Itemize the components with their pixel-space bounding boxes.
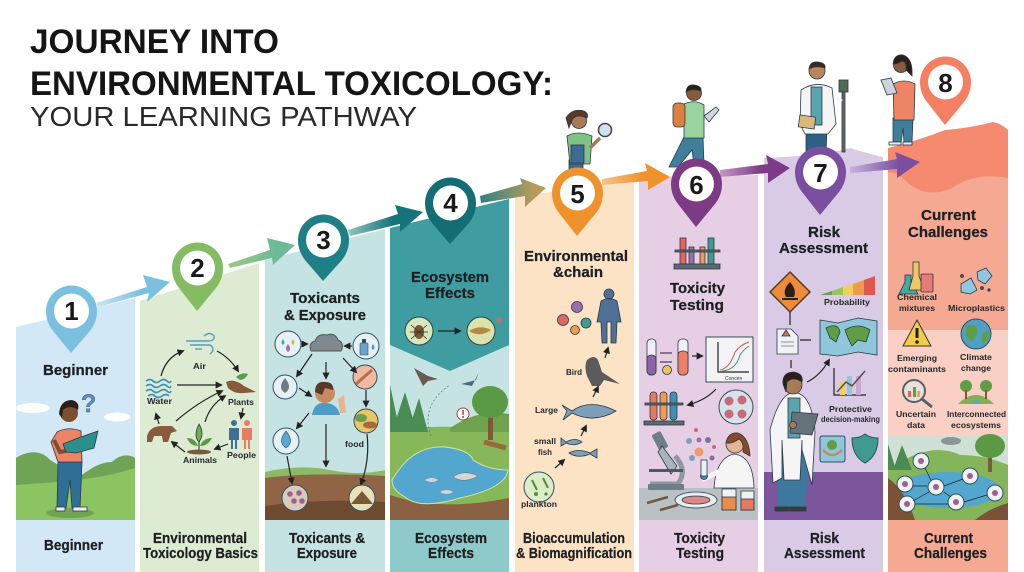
label: ecosystem: Effects — [428, 545, 474, 562]
icon: document — [777, 329, 798, 354]
arrow: 7 to 8 — [850, 152, 920, 178]
pin 7 — [795, 146, 846, 215]
panel: current challenges: Uncertain — [896, 409, 936, 419]
label: toxicity testing — [674, 530, 726, 562]
character: lab scientist — [700, 433, 754, 488]
heading: toxicants — [284, 290, 366, 324]
chart: probability bars — [820, 276, 875, 295]
pin 7: 7 — [813, 158, 828, 188]
icon: food — [354, 409, 378, 433]
panel: current challenges: mixtures — [899, 303, 935, 313]
heading: current challenges — [908, 207, 988, 241]
icon: microplastics — [960, 268, 992, 294]
diagram: environment cycle: Plants — [228, 397, 254, 407]
icon: large fish — [562, 404, 616, 420]
panel: risk assessment: Probability — [824, 297, 870, 307]
heading: environmental chain: Environmental — [524, 248, 628, 265]
landscape: interconnected ecosystem — [888, 434, 1008, 520]
icon: microscope — [648, 431, 684, 490]
panel: current challenges: contaminants — [888, 364, 946, 374]
pin 2 — [172, 243, 223, 311]
tube: salmon — [678, 339, 688, 375]
heading: toxicants: Toxicants — [290, 290, 360, 307]
label: toxicity testing: Testing — [676, 545, 724, 562]
heading: toxicity testing: Toxicity — [670, 280, 726, 297]
diagram: food chain: fish — [538, 447, 552, 457]
pin 5 — [552, 168, 603, 236]
diagram: exposure routes: food — [345, 439, 364, 449]
heading: ecosystem: Effects — [425, 285, 475, 302]
label: current challenges — [914, 530, 987, 562]
character: reading student: ? — [81, 390, 96, 418]
heading: toxicants: & Exposure — [284, 307, 366, 324]
chevron header — [390, 199, 509, 371]
pin 5: 5 — [570, 179, 585, 209]
soil layer — [265, 467, 385, 520]
landscape: hills — [16, 403, 135, 572]
icon: petri dish — [719, 390, 753, 424]
label: risk assessment: Assessment — [784, 545, 865, 562]
chart: trend — [834, 368, 866, 395]
icon: human — [597, 289, 621, 343]
label: toxicants: Exposure — [297, 545, 357, 562]
pin 2: 2 — [190, 253, 205, 283]
icon: soil contaminants — [282, 485, 308, 511]
arrows: cycle — [156, 351, 243, 452]
banner: wavy peak — [888, 122, 1008, 192]
icon: otter — [226, 373, 256, 393]
title: ENVIRONMENTAL TOXICOLOGY: — [30, 65, 553, 103]
chart: dose response: Concen — [725, 376, 742, 382]
icon: water drop — [273, 428, 299, 454]
icon: magnifier — [903, 380, 932, 407]
tube: purple — [647, 339, 656, 375]
heading: environmental chain: &chain — [553, 264, 603, 281]
label: bioaccumulation — [516, 530, 632, 562]
label: bioaccumulation: Bioaccumulation — [523, 530, 625, 547]
diagram: environment cycle — [146, 334, 256, 465]
heading: current challenges: Current — [921, 207, 976, 224]
heading: risk assessment — [779, 224, 868, 257]
icon: breathing person — [312, 382, 346, 415]
diagram: environment cycle: Water — [147, 396, 173, 406]
dots: particles — [686, 428, 716, 461]
label: toxicity testing: Toxicity — [674, 530, 726, 547]
diagram: environment cycle: Animals — [183, 455, 217, 465]
panel: current challenges: Climate — [960, 352, 992, 362]
label: beginner: Beginner — [44, 537, 103, 554]
title — [30, 23, 553, 132]
pin 8: 8 — [938, 68, 953, 98]
character: student with magnifier — [566, 110, 612, 172]
character: woman with tablet — [881, 55, 915, 145]
arrows: food chain — [555, 348, 608, 468]
pin 6 — [671, 158, 722, 227]
icon: sediment — [349, 485, 375, 511]
icon: test tube rack — [674, 238, 720, 269]
landscape: forest and pond — [390, 368, 509, 520]
icon: bottle — [353, 333, 379, 359]
diagram: food chain: Bird — [566, 367, 582, 377]
arrow: 5 to 6 — [602, 163, 670, 190]
icon: warning triangle — [903, 320, 931, 346]
icon: shield — [852, 434, 878, 463]
label: ecosystem: Ecosystem — [415, 530, 487, 547]
panel: ecosystem — [390, 199, 509, 572]
pin 1: 1 — [64, 296, 79, 326]
pin 4: 4 — [443, 188, 458, 218]
icon: droplets — [275, 331, 301, 357]
arrow: 3 to 4 — [348, 205, 423, 236]
arrow: 6 to 7 — [720, 155, 790, 183]
icon: connected trees — [958, 380, 994, 404]
icon: people — [229, 420, 252, 449]
icon: glassware — [647, 489, 754, 510]
label: basics: Environmental — [153, 530, 247, 547]
diagram: testing workflow — [644, 337, 754, 510]
icon: flasks — [899, 262, 933, 294]
label: risk assessment: Risk — [810, 530, 840, 547]
character: reading student — [46, 390, 98, 518]
pin 3 — [298, 215, 349, 281]
character: hiker with tablet — [669, 85, 719, 167]
icon: globe — [961, 319, 991, 349]
heading: ecosystem: Ecosystem — [411, 269, 489, 286]
panel: current challenges: change — [961, 363, 991, 373]
panel: current challenges — [888, 122, 1008, 572]
panel: current challenges: data — [907, 420, 925, 430]
pin 6: 6 — [689, 170, 704, 200]
icon: water — [146, 380, 171, 398]
icon: bird — [586, 357, 620, 386]
arrow: 2 to 3 — [228, 238, 295, 268]
label: current challenges: Current — [924, 530, 973, 547]
icon: hazard diamond — [770, 272, 810, 312]
label: toxicants: Toxicants & — [289, 530, 365, 547]
diagram: food chain: Large — [535, 405, 558, 415]
icon: protective hands — [820, 436, 845, 462]
icon: sprout — [187, 424, 212, 454]
icon: rack of tubes — [644, 392, 684, 425]
heading: toxicity testing: Testing — [670, 297, 724, 314]
arrow: 4 to 5 — [480, 178, 546, 207]
label: toxicants — [289, 530, 365, 562]
label: risk assessment — [784, 530, 865, 562]
label: basics: Toxicology Basics — [143, 545, 258, 562]
panel: current challenges: Chemical — [897, 292, 937, 302]
panel: toxicants — [265, 229, 385, 572]
diagram: food chain — [521, 289, 621, 509]
heading: environmental chain — [524, 248, 628, 281]
icon: insect to fish — [405, 317, 502, 345]
label: ecosystem — [415, 530, 487, 562]
character: field scientist — [798, 62, 848, 152]
title: JOURNEY INTO — [30, 23, 279, 61]
chart: dose response — [706, 337, 753, 382]
heading: beginner: Beginner — [43, 362, 108, 379]
icon: contaminant dots — [558, 302, 591, 334]
panel: bioaccumulation — [515, 180, 634, 572]
panel: risk assessment: decision-making — [821, 414, 880, 424]
diagram: food chain: plankton — [521, 499, 557, 509]
icon: bear — [147, 426, 177, 442]
arrow: 1 to 2 — [96, 275, 170, 307]
label: basics — [143, 530, 258, 562]
diagram: environment cycle: Air — [193, 361, 207, 371]
panel: toxicity testing — [639, 175, 758, 572]
icon: oil drop — [273, 375, 297, 399]
pin 3: 3 — [316, 225, 331, 255]
arrows: routes — [287, 344, 368, 484]
panel: current challenges: Emerging — [897, 353, 937, 363]
panel: risk assessment: Protective — [829, 404, 872, 414]
diagram: food chain: small — [534, 436, 556, 446]
panel: risk assessment — [764, 148, 883, 572]
heading: risk assessment: Assessment — [779, 240, 868, 257]
title: YOUR LEARNING PATHWAY — [30, 101, 417, 132]
panel: beginner — [16, 298, 135, 572]
panel: current challenges: ecosystems — [951, 420, 1001, 430]
character: risk assessor — [770, 372, 818, 511]
heading: toxicity testing — [670, 280, 726, 314]
label: bioaccumulation: & Biomagnification — [516, 545, 632, 562]
panel: current challenges: Interconnected — [947, 409, 1006, 419]
panel: current challenges: Microplastics — [948, 303, 1005, 313]
pin 8 — [920, 56, 971, 125]
label: current challenges: Challenges — [914, 545, 987, 562]
heading: risk assessment: Risk — [808, 224, 841, 241]
heading: current challenges: Challenges — [908, 224, 988, 241]
icon: small fish — [561, 438, 597, 458]
pin 4 — [425, 178, 476, 244]
pin 1 — [46, 286, 97, 353]
icon: cloud — [310, 334, 342, 351]
diagram: exposure routes — [273, 331, 379, 511]
heading: ecosystem — [411, 269, 489, 302]
icon: skin contact — [353, 365, 377, 389]
panel: basics — [140, 263, 259, 572]
diagram: environment cycle: People — [227, 450, 256, 460]
icon: world map — [820, 318, 877, 356]
icon: plankton — [524, 472, 554, 502]
icon: air — [186, 334, 214, 354]
